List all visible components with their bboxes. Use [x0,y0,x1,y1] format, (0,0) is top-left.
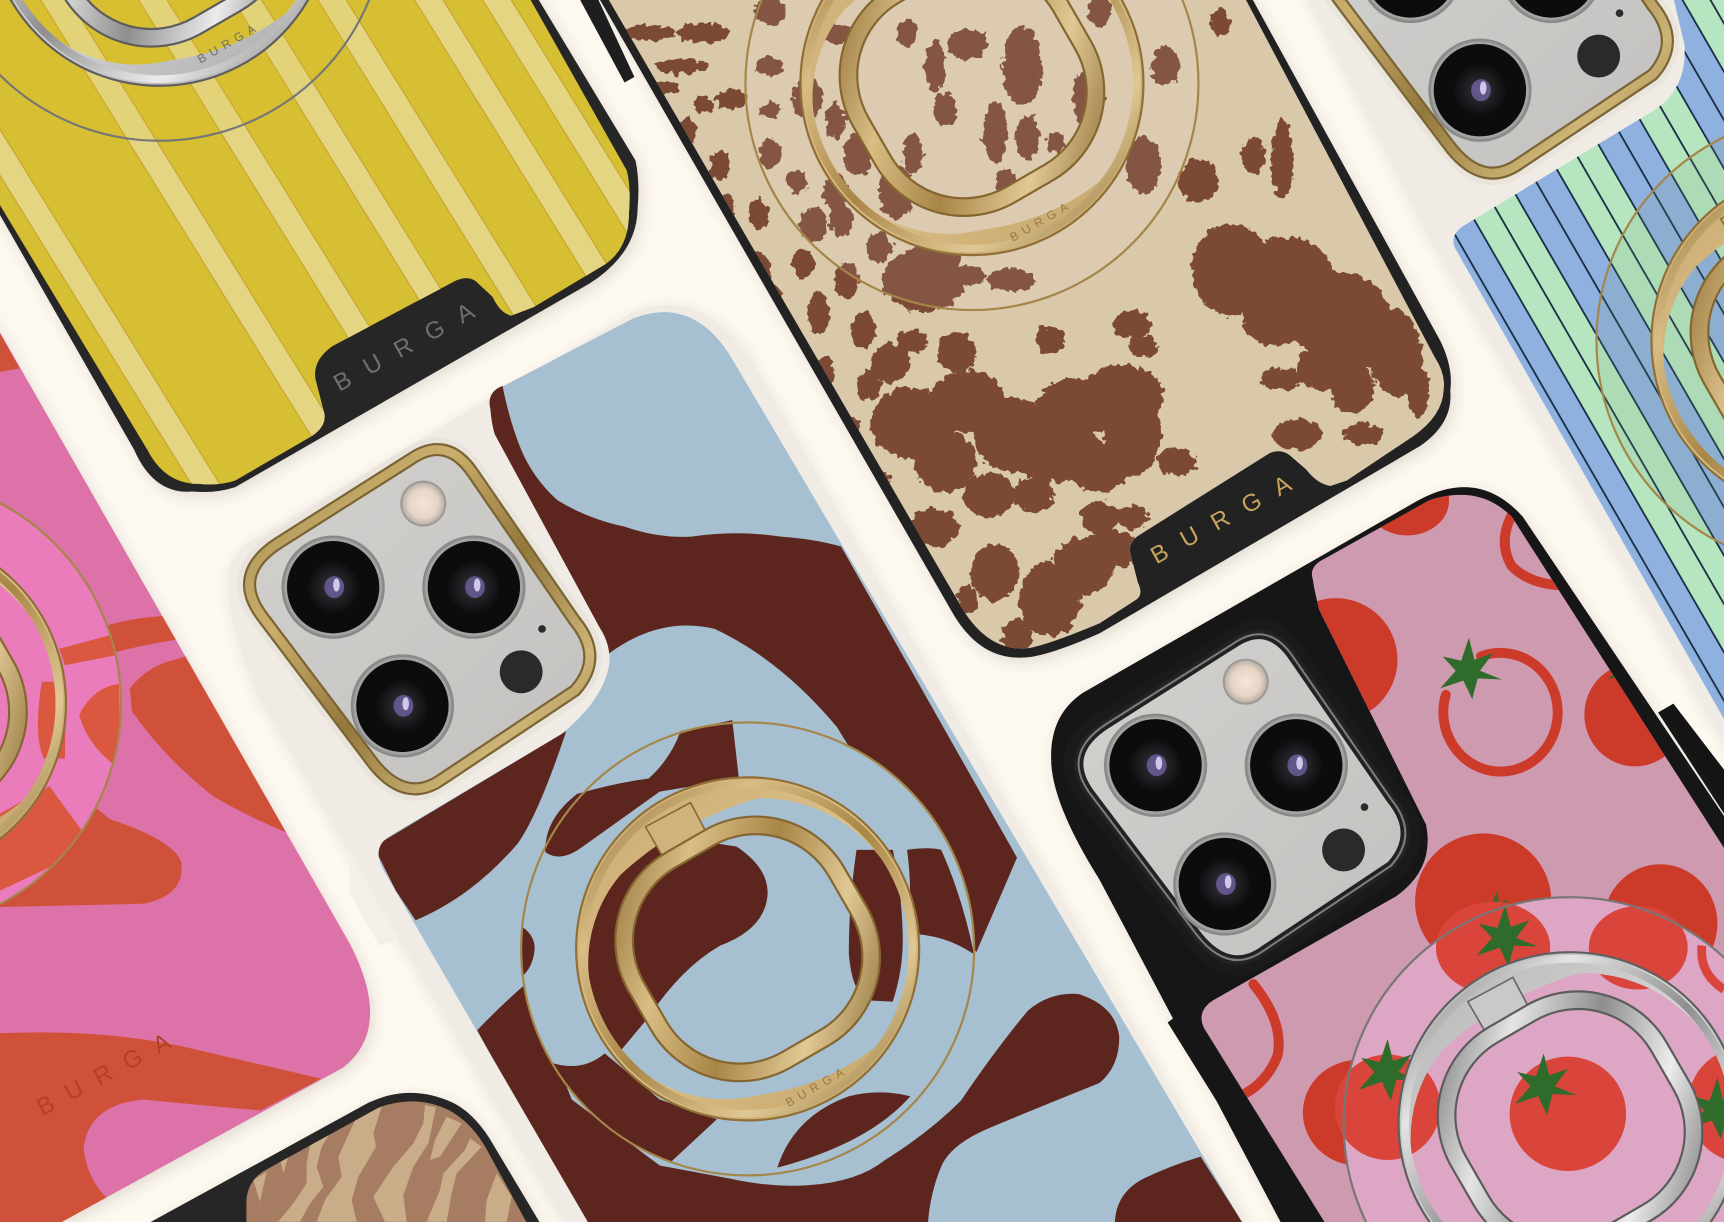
magnetic ring: tomato case [1335,897,1724,1222]
phone case: pink and orange wave [0,313,370,1222]
magnetic ring: blue case: BURGA [783,1062,851,1110]
side buttons: tomato case [1168,704,1724,1116]
magnetic ring: blue case [521,720,974,1175]
magnetic ring: pink case [0,502,122,906]
camera module: gold frame, blue case [250,450,590,789]
magnetic ring: stripes case [1596,114,1724,567]
magnetic ring: yellow case: BURGA [195,19,263,66]
phone case: blue and brown wave [228,297,1264,1222]
side button: blue case [350,852,396,946]
phone case: tomato print [1051,465,1724,1222]
phone case: blue and green stripes [1303,0,1724,764]
phone case: cow print [577,0,1462,671]
logo: BURGA on pink case: BURGA [32,1021,189,1121]
phone case: zebra tan print [150,1089,544,1222]
magnetic ring: yellow case [0,0,386,141]
logo: BURGA on cow case: BURGA [1146,462,1311,570]
stripes panel [1453,0,1724,742]
magnetic ring: cow case: BURGA [1007,197,1075,245]
camera module: black frame, tomato case [1072,628,1412,967]
side button: cow case [577,0,634,82]
logo: BURGA on yellow case: BURGA [329,289,494,397]
camera module: gold frame, stripes case [1327,0,1667,173]
phone case: yellow stripes [0,0,646,501]
magnetic ring: cow case [745,0,1198,310]
